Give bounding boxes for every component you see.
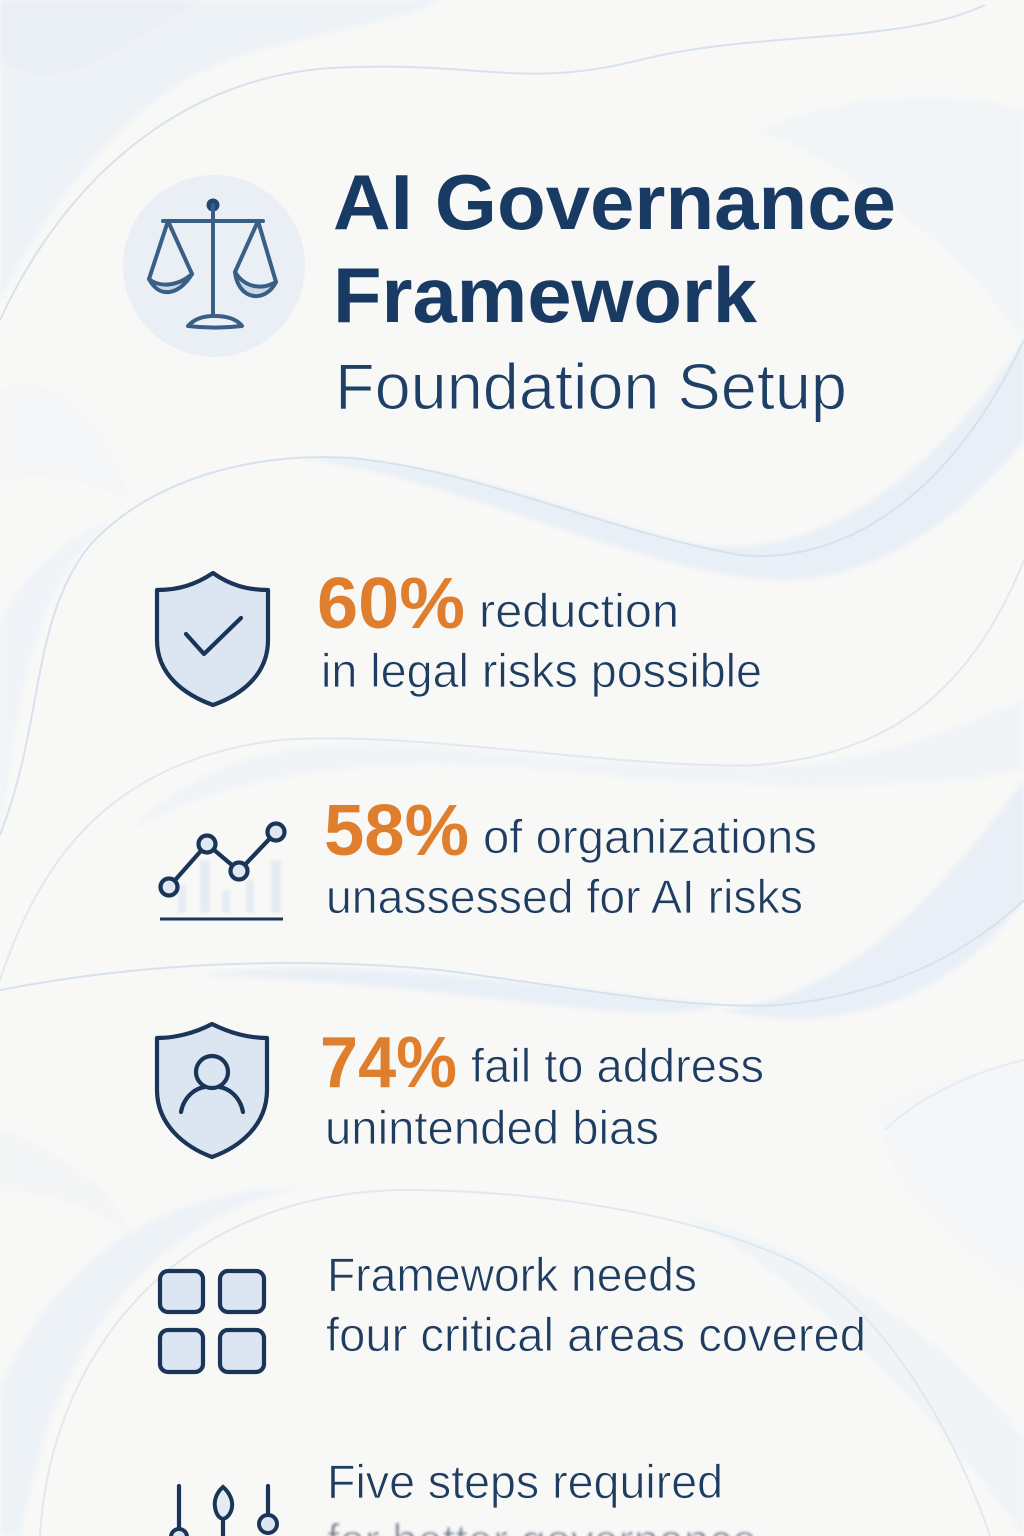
title	[333, 158, 896, 339]
icon: line chart	[160, 824, 284, 919]
stat text: 58%	[324, 791, 817, 923]
icon: four squares grid	[160, 1271, 264, 1372]
text: five steps	[327, 1455, 757, 1536]
text: four critical areas: four critical areas covered	[326, 1308, 866, 1361]
stat text: 58%: 58%	[324, 791, 469, 871]
stat text: 58%: unassessed for AI risks	[326, 870, 803, 923]
stat row: 58% unassessed	[160, 791, 817, 923]
stat row: 74% bias	[157, 1023, 764, 1157]
stat text: 60%	[317, 564, 762, 697]
title: Framework	[333, 251, 758, 339]
row: four critical areas	[160, 1248, 866, 1372]
text: five steps: Five steps required	[327, 1455, 723, 1508]
stat text: 60%: reduction	[479, 584, 679, 637]
stat text: 74%: 74%	[320, 1023, 457, 1103]
text: four critical areas	[326, 1248, 866, 1361]
text: four critical areas: Framework needs	[327, 1248, 697, 1301]
stat text: 60%: in legal risks possible	[321, 644, 762, 697]
subtitle: Foundation Setup	[335, 350, 847, 423]
stat row: 60% legal risks	[157, 564, 762, 705]
stat text: 74%	[320, 1023, 764, 1154]
icon: shield with check	[157, 573, 268, 705]
stat text: 74%: unintended bias	[325, 1101, 659, 1154]
icon: scales of justice	[123, 175, 305, 357]
row: five steps	[171, 1455, 757, 1536]
title: AI Governance	[333, 158, 896, 246]
icon: shield with person	[157, 1024, 267, 1157]
stat text: 60%: 60%	[317, 564, 465, 644]
icon: step sliders	[171, 1486, 277, 1536]
stat text: 58%: of organizations	[483, 810, 817, 863]
stat text: 74%: fail to address	[471, 1039, 764, 1092]
